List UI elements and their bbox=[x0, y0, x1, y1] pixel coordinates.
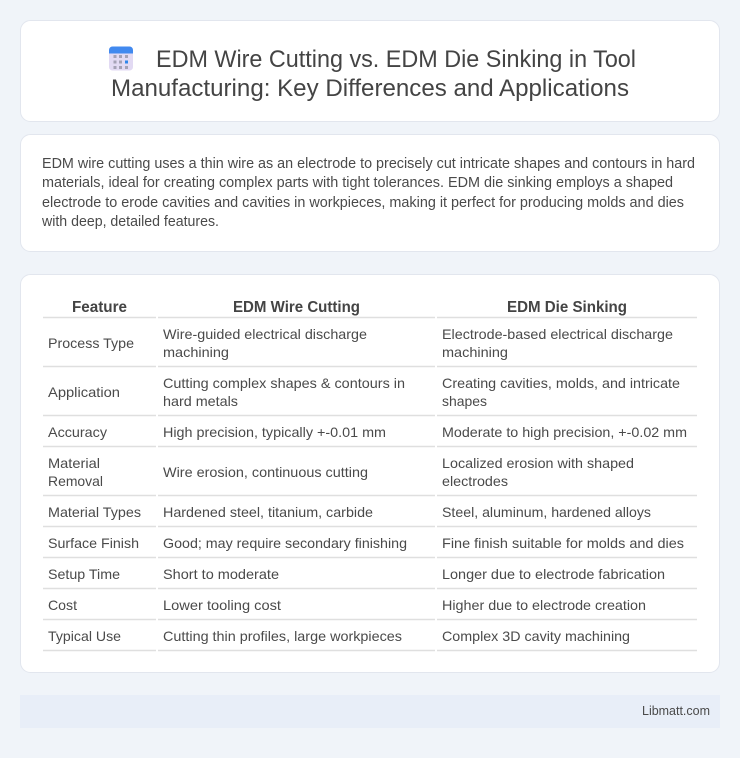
row: application: Cutting complex shapes & contours in bbox=[163, 375, 405, 391]
row: cost: Higher due to electrode creation bbox=[442, 597, 646, 613]
row: application: shapes bbox=[442, 393, 487, 409]
row: material types: Steel, aluminum, hardened alloys bbox=[442, 504, 651, 520]
row: typical use: Cutting thin profiles, large workpieces bbox=[163, 628, 402, 644]
row: surface finish: Surface Finish bbox=[48, 535, 139, 551]
intro text: EDM wire cutting uses a thin wire as an electrode to precisely cut intricate shapes and contours in hard bbox=[42, 156, 695, 172]
row: process type bbox=[48, 326, 673, 360]
row: cost: Cost bbox=[48, 597, 77, 613]
intro text: with deep, detailed features. bbox=[41, 214, 219, 230]
row: accuracy bbox=[48, 424, 687, 440]
row: surface finish: Fine finish suitable for molds and dies bbox=[442, 535, 684, 551]
icon: calendar grid bbox=[109, 46, 133, 70]
row: material removal bbox=[48, 455, 634, 489]
panel: intro description bbox=[20, 134, 720, 252]
row: accuracy: High precision, typically +-0.01 mm bbox=[163, 424, 386, 440]
panel: title card bbox=[20, 20, 720, 122]
row: material types: Hardened steel, titanium, carbide bbox=[163, 504, 373, 520]
table header row: EDM Die Sinking bbox=[507, 299, 627, 316]
row: application: Application bbox=[48, 384, 120, 400]
row: setup time: Setup Time bbox=[48, 566, 120, 582]
row: cost: Lower tooling cost bbox=[163, 597, 281, 613]
row: material removal: Removal bbox=[48, 473, 103, 489]
footer: Libmatt.com bbox=[642, 704, 710, 718]
intro text: electrode to erode cavities and cavities in workpieces, making it perfect for producing molds and dies bbox=[42, 195, 684, 211]
row: application: hard metals bbox=[163, 393, 238, 409]
row: material removal: Material bbox=[48, 455, 100, 471]
row: accuracy: Accuracy bbox=[48, 424, 107, 440]
row: process type: Wire-guided electrical discharge bbox=[163, 326, 367, 342]
row: setup time: Short to moderate bbox=[163, 566, 279, 582]
row: accuracy: Moderate to high precision, +-0.02 mm bbox=[442, 424, 687, 440]
table header row bbox=[72, 299, 627, 316]
row: typical use bbox=[48, 628, 630, 644]
row: material removal: Localized erosion with shaped bbox=[442, 455, 634, 471]
title: Manufacturing: Key Differences and Applications bbox=[111, 75, 629, 102]
row: typical use: Typical Use bbox=[48, 628, 121, 644]
row: surface finish: Good; may require secondary finishing bbox=[163, 535, 407, 551]
title bbox=[111, 46, 636, 102]
row: process type: machining bbox=[442, 344, 508, 360]
row: surface finish bbox=[48, 535, 684, 551]
row: setup time: Longer due to electrode fabrication bbox=[442, 566, 665, 582]
row: process type: machining bbox=[163, 344, 229, 360]
row: material removal: electrodes bbox=[442, 473, 508, 489]
row: material removal: Wire erosion, continuous cutting bbox=[163, 464, 368, 480]
row: application: Creating cavities, molds, and intricate bbox=[442, 375, 680, 391]
table header row: EDM Wire Cutting bbox=[233, 299, 360, 316]
title: EDM Wire Cutting vs. EDM Die Sinking in Tool bbox=[156, 46, 636, 73]
row: cost bbox=[48, 597, 646, 613]
row: process type: Process Type bbox=[48, 335, 134, 351]
row: application bbox=[48, 375, 680, 409]
panel: comparison table bbox=[20, 274, 720, 672]
row: typical use: Complex 3D cavity machining bbox=[442, 628, 630, 644]
row: setup time bbox=[48, 566, 665, 582]
row: material types: Material Types bbox=[48, 504, 141, 520]
footer bbox=[20, 695, 720, 728]
intro text: materials, ideal for creating complex parts with tight tolerances. EDM die sinking employs a shaped bbox=[42, 175, 673, 191]
intro text bbox=[41, 156, 695, 230]
row: material types bbox=[48, 504, 651, 520]
table header row: Feature bbox=[72, 299, 127, 316]
row: process type: Electrode-based electrical discharge bbox=[442, 326, 673, 342]
